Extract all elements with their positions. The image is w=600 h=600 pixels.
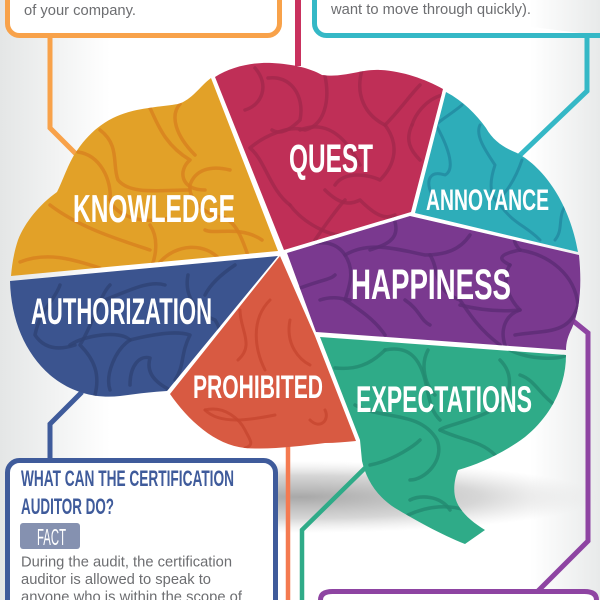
brain segment: knowledge <box>11 78 278 276</box>
brain segment: happiness <box>287 216 580 350</box>
brain segment: quest <box>215 62 443 250</box>
label: HAPPINESS: HAPPINESS <box>351 261 511 309</box>
panel: purple box <box>320 592 596 600</box>
blue box heading line 1: WHAT CAN THE CERTIFICATION <box>21 466 234 491</box>
connector: prohibited line <box>286 440 290 600</box>
blue box body text: auditor is allowed to speak to <box>21 572 211 588</box>
brain segment: authorization <box>10 256 278 397</box>
fact badge: FACT <box>37 524 66 550</box>
orange box text: of your company. <box>24 3 136 19</box>
label: PROHIBITED: PROHIBITED <box>193 369 323 405</box>
label: QUEST: QUEST <box>289 137 373 181</box>
panel: teal box <box>314 0 600 36</box>
panel: blue box what can the certification auditor do <box>8 460 276 600</box>
teal box text: want to move through quickly). <box>330 2 531 18</box>
panel: orange box <box>8 0 280 36</box>
connector: quest to crimson box <box>295 0 301 66</box>
brain segment: annoyance <box>415 92 578 252</box>
blue box body text <box>21 554 243 600</box>
brain segment: expectations <box>320 337 566 544</box>
connector: annoyance to teal box <box>517 36 587 158</box>
connector: expectations line <box>302 467 366 600</box>
connector: happiness line <box>538 320 588 591</box>
connector: authorization to blue box <box>50 392 82 460</box>
connector: knowledge to orange box <box>50 36 77 155</box>
brain segment: prohibited <box>165 250 360 450</box>
blue box heading line 2: AUDITOR DO? <box>21 494 114 519</box>
label: KNOWLEDGE: KNOWLEDGE <box>73 188 235 231</box>
fact badge <box>20 523 80 550</box>
label: AUTHORIZATION: AUTHORIZATION <box>31 291 212 332</box>
blue box body text: During the audit, the certification <box>21 554 232 570</box>
